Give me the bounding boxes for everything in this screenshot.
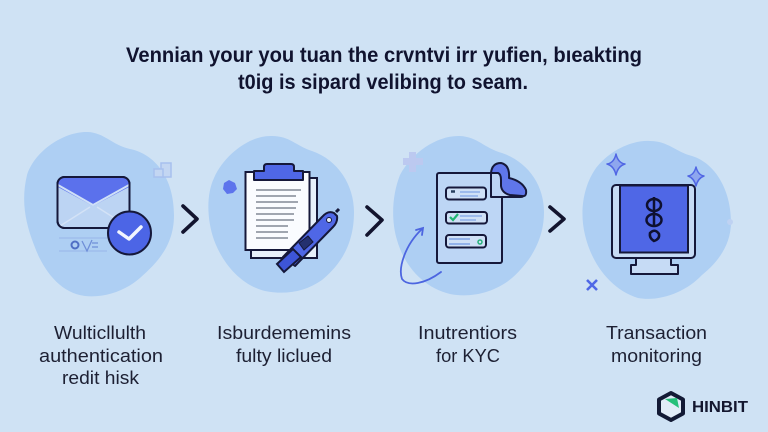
label 4: monitoring — [611, 346, 702, 366]
icon: plus — [403, 152, 423, 172]
icons: sparkles — [607, 154, 704, 186]
label 2: fulty liclued — [236, 346, 332, 366]
icon: faint dot — [727, 219, 733, 225]
panel: instructions for KYC — [393, 136, 544, 366]
icon: folded corner — [491, 163, 526, 197]
icon: x mark — [587, 280, 597, 290]
icon: pen — [277, 209, 339, 272]
logo wordmark: HINBIT — [692, 399, 749, 416]
icon: faint key line — [59, 238, 107, 251]
blob background 2 — [208, 136, 354, 293]
panel: documents — [208, 136, 354, 366]
label 4: Transaction — [606, 323, 707, 343]
blob background 4 — [582, 141, 731, 299]
icon: curved arrow — [401, 228, 441, 283]
title: Vennian your you tuan the crvntvi irr yufien, bıeakting — [126, 44, 642, 67]
label 3: Inutrentiors — [418, 323, 517, 343]
title: t0ig is sipard velibing to seam. — [238, 71, 528, 94]
label 2 — [217, 323, 351, 366]
panel: multi-factor authentication — [24, 132, 174, 388]
arrow 1 — [183, 206, 197, 232]
label 1: authentication — [39, 346, 163, 366]
icon: faint squares — [154, 163, 171, 177]
panel: transaction monitoring — [582, 141, 733, 366]
icon: check badge — [108, 212, 151, 254]
icon: hexagon logo — [659, 393, 683, 420]
icon: envelope — [58, 177, 130, 228]
label 3: for KYC — [436, 346, 500, 366]
label 3 — [418, 323, 517, 366]
arrow 3 — [550, 207, 564, 231]
title — [126, 44, 642, 94]
label 1: redit hisk — [62, 368, 140, 388]
icon: hexagon dot — [223, 180, 237, 194]
label 4 — [606, 323, 707, 366]
logo — [659, 393, 749, 420]
icon: form document — [437, 173, 502, 263]
label 1 — [39, 323, 163, 388]
blob background 1 — [24, 132, 174, 296]
blob background 3 — [393, 136, 544, 295]
arrow 2 — [367, 207, 382, 235]
label 2: Isburdememins — [217, 323, 351, 343]
label 1: Wulticllulth — [54, 323, 146, 343]
icon: monitor — [612, 185, 695, 274]
icon: clipboard — [246, 164, 317, 258]
